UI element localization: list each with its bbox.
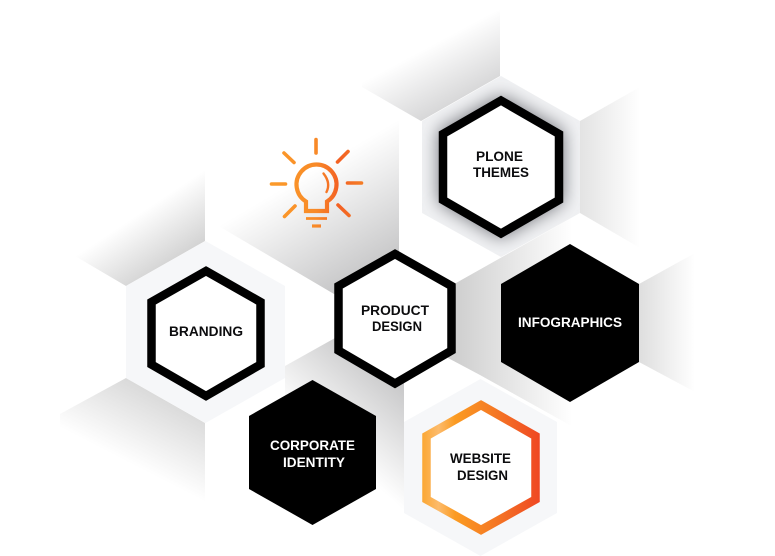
panel: website design (404, 379, 557, 556)
solid hexagon (501, 244, 639, 402)
label: WEBSITE (450, 451, 511, 466)
panel: corporate identity (249, 380, 376, 525)
icon: light bulb (272, 140, 362, 226)
hexagon ring (443, 100, 559, 234)
halo hexagon (404, 379, 557, 556)
facet: right of infographics (639, 253, 695, 392)
label (473, 149, 529, 180)
facet: behind light bulb (205, 115, 399, 294)
hexagon ring (152, 271, 260, 396)
facet: between plone themes and infographics (448, 216, 575, 428)
label: INFOGRAPHICS (518, 315, 622, 330)
label (450, 451, 511, 483)
halo hexagon (422, 76, 580, 257)
panel: plone themes (422, 76, 580, 257)
panel: infographics (501, 244, 639, 402)
label: THEMES (473, 165, 529, 180)
facet: below branding (60, 378, 205, 515)
label (361, 303, 430, 334)
panel: branding (126, 241, 285, 423)
label (270, 438, 355, 470)
label: PLONE (476, 149, 523, 164)
soft shadow (439, 96, 563, 238)
facet: right of plone themes (580, 87, 640, 248)
facet: top (362, 10, 500, 121)
hexagon ring (338, 254, 452, 384)
background shaded hexagon facets (60, 10, 695, 530)
label: CORPORATE (270, 438, 355, 453)
label: PRODUCT (361, 303, 430, 318)
halo hexagon (126, 241, 285, 423)
label: IDENTITY (283, 455, 345, 470)
label: BRANDING (169, 324, 243, 339)
facet: above branding (75, 160, 205, 286)
hexagon ring (426, 405, 536, 530)
facet: behind corporate identity (285, 338, 404, 530)
label: DESIGN (372, 319, 422, 334)
panel: product design (338, 254, 452, 384)
label: DESIGN (457, 468, 508, 483)
solid hexagon (249, 380, 376, 525)
